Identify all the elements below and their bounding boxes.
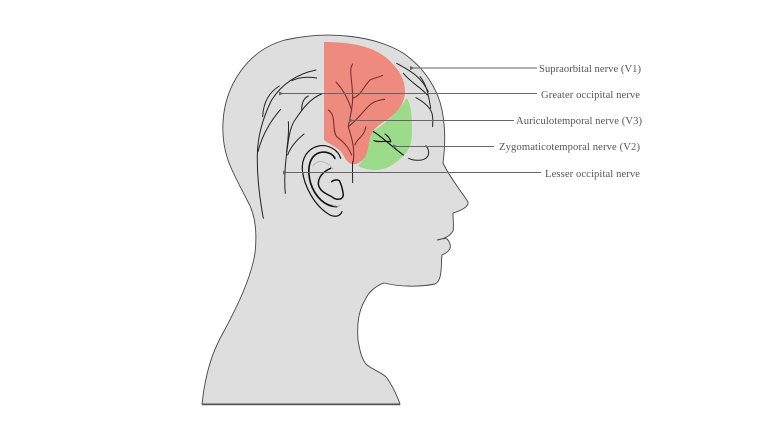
green zone: V2 bbox=[358, 98, 412, 170]
arrow: Greater occipital nerve bbox=[283, 92, 537, 94]
base line bbox=[202, 404, 400, 406]
label: Auriculotemporal nerve: Auriculotemporal nerve (V3) bbox=[516, 116, 642, 127]
ear bbox=[302, 146, 343, 216]
red zone: V1 and occipital bbox=[324, 42, 405, 164]
arrow: Lesser occipital nerve bbox=[287, 172, 541, 174]
label: Zygomaticotemporal nerve: Zygomaticotemporal nerve (V2) bbox=[499, 142, 640, 153]
head silhouette bbox=[202, 35, 468, 404]
arrow: Auriculotemporal nerve bbox=[353, 120, 514, 122]
arrow: Zygomaticotemporal nerve bbox=[397, 146, 494, 148]
arrow: Supraorbital nerve bbox=[414, 67, 537, 69]
label: Lesser occipital nerve: Lesser occipital nerve bbox=[545, 169, 640, 180]
eye bbox=[409, 146, 429, 160]
forehead nerves bbox=[397, 63, 433, 160]
green zone nerve bbox=[373, 132, 403, 155]
back of head nerves bbox=[257, 70, 353, 218]
nerves in zoomed coordinates bbox=[257, 63, 433, 218]
label: Greater occipital nerve: Greater occipital nerve bbox=[541, 90, 640, 101]
label: Supraorbital nerve: Supraorbital nerve (V1) bbox=[539, 64, 641, 75]
red zone nerves bbox=[328, 64, 385, 162]
temporal branch bbox=[351, 162, 354, 183]
